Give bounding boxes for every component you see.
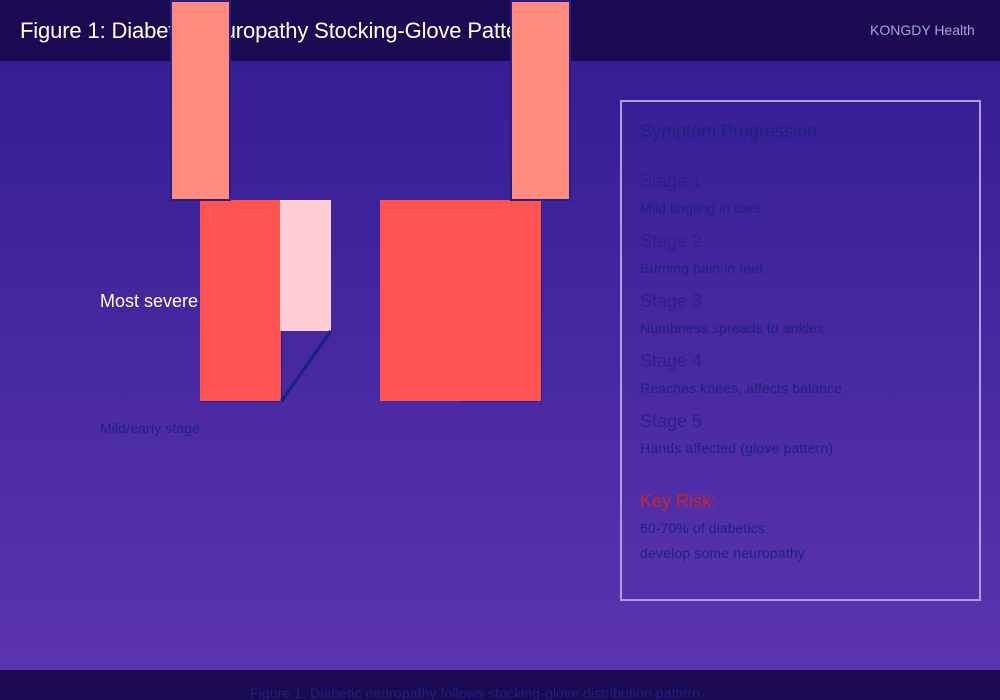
panel border — [621, 101, 980, 600]
stage 3: Stage 3 — [640, 291, 702, 311]
stage 1: Stage 1 — [640, 171, 702, 191]
panel heading: Symptom Progression: — [640, 121, 822, 141]
key risk heading: Key Risk: — [640, 491, 716, 511]
title: Figure 1: Diabetic Neuropathy Stocking-Glove Pattern — [20, 18, 537, 43]
label: mild stage: Mild/early stage — [100, 420, 200, 436]
stage 5 text: Hands affected (glove pattern) — [640, 440, 833, 456]
left foot — [200, 200, 331, 402]
left leg — [170, 0, 231, 201]
brand label: KONGDY Health — [870, 22, 975, 38]
stage 5: Stage 5 — [640, 411, 702, 431]
right leg — [510, 0, 571, 201]
stage 3 text: Numbness spreads to ankles — [640, 320, 824, 336]
key risk line 2: develop some neuropathy — [640, 545, 805, 561]
stage 4: Stage 4 — [640, 351, 702, 371]
stage 2: Stage 2 — [640, 231, 702, 251]
key risk line 1: 60-70% of diabetics — [640, 520, 765, 536]
stage 1 text: Mild tingling in toes — [640, 200, 761, 216]
label: most severe: Most severe — [100, 291, 198, 311]
stage 2 text: Burning pain in feet — [640, 260, 763, 276]
right foot — [380, 200, 542, 402]
stage 4 text: Reaches knees, affects balance — [640, 380, 842, 396]
